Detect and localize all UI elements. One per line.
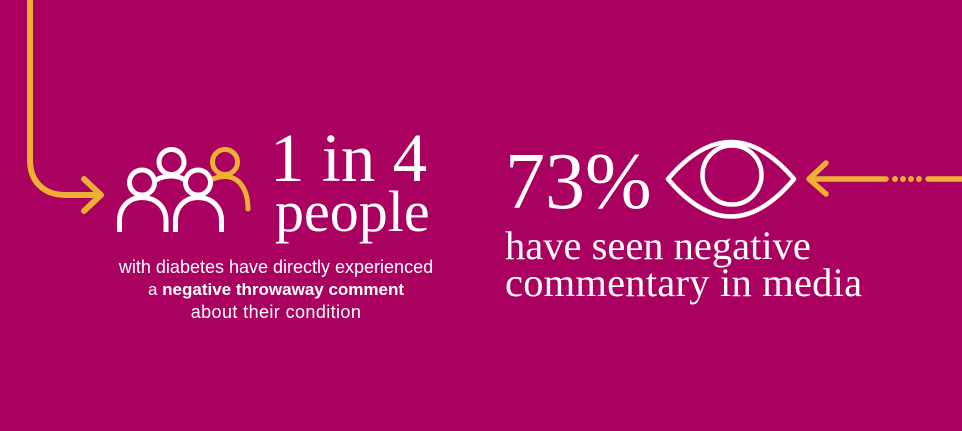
text: media commentary: have seen negative [505, 223, 811, 268]
arrow: gold arrow from top left [27, 0, 104, 214]
text: diabetes description: a negative throwaway comment [148, 280, 404, 299]
text: media commentary: commentary in media [505, 260, 862, 305]
icon: white people [120, 150, 222, 232]
icon: group of people [117, 147, 250, 232]
heading: 1 in 4: 1 in 4 [270, 120, 427, 196]
text: media commentary [505, 223, 862, 305]
arrow: gold dotted arrow from right [806, 160, 962, 197]
stat: 73%: 73% [505, 138, 652, 226]
text: diabetes description: about their condition [191, 302, 361, 322]
icon: eye [666, 140, 796, 219]
heading: people: people [275, 179, 430, 244]
text: diabetes description: with diabetes have directly experienced [119, 257, 433, 277]
icon: gold person [212, 150, 248, 209]
text: diabetes description [118, 257, 433, 322]
